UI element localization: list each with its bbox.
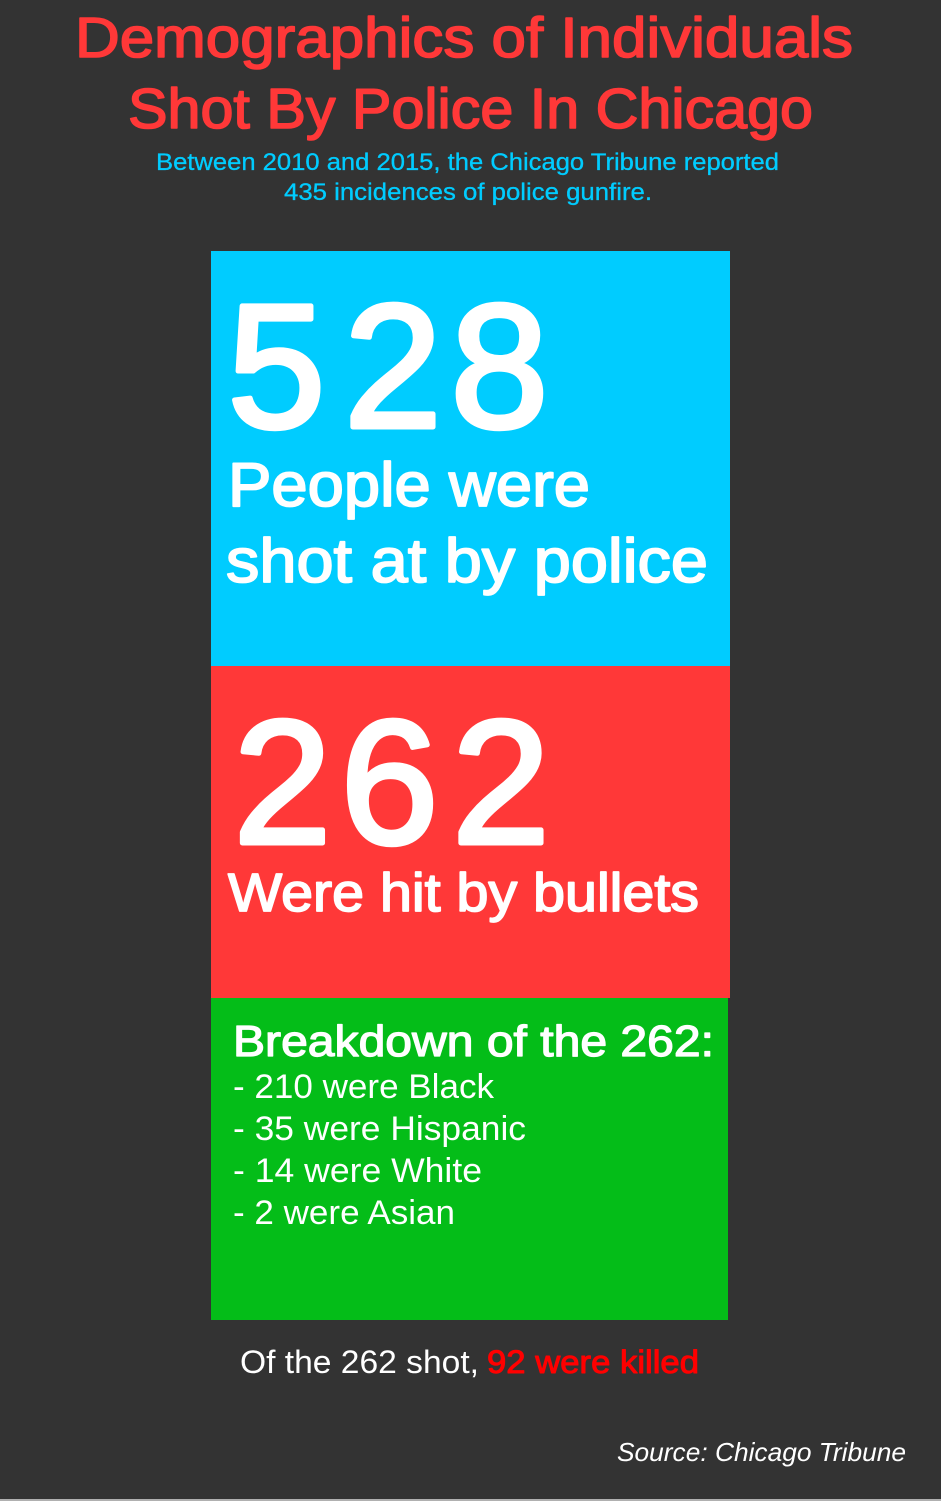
subtitle: Between 2010 and 2015, the Chicago Tribune reported xyxy=(156,149,779,176)
callout: killed xyxy=(240,1344,699,1380)
panel: hit by bullets xyxy=(211,666,730,998)
list: breakdown by race: - 14 were White xyxy=(233,1152,482,1190)
list: breakdown by race: - 35 were Hispanic xyxy=(233,1110,526,1148)
text: were hit by bullets: Were hit by bullets xyxy=(228,863,699,923)
text: people were shot at by police: shot at by police xyxy=(226,527,708,596)
title: Demographics of Individuals xyxy=(75,6,853,70)
subtitle: 435 incidences of police gunfire. xyxy=(284,179,652,206)
title: Shot By Police In Chicago xyxy=(128,77,813,141)
source: Source: Chicago Tribune xyxy=(617,1437,906,1467)
panel: breakdown xyxy=(211,998,728,1320)
list: breakdown by race: - 210 were Black xyxy=(233,1068,495,1106)
text: people were shot at by police: People were xyxy=(228,451,590,520)
callout: killed: 92 were killed xyxy=(487,1344,699,1380)
number: 262: 262 xyxy=(234,685,550,881)
callout: killed: Of the 262 shot, xyxy=(240,1344,479,1380)
list: breakdown by race: - 2 were Asian xyxy=(233,1194,455,1232)
subtitle xyxy=(156,149,779,206)
list: breakdown by race xyxy=(233,1068,526,1232)
number: 528: 528 xyxy=(228,269,548,465)
heading: breakdown of the 262: Breakdown of the 262: xyxy=(233,1017,714,1066)
panel: people shot at xyxy=(211,251,730,666)
title xyxy=(75,6,853,141)
text: people were shot at by police xyxy=(226,451,708,596)
